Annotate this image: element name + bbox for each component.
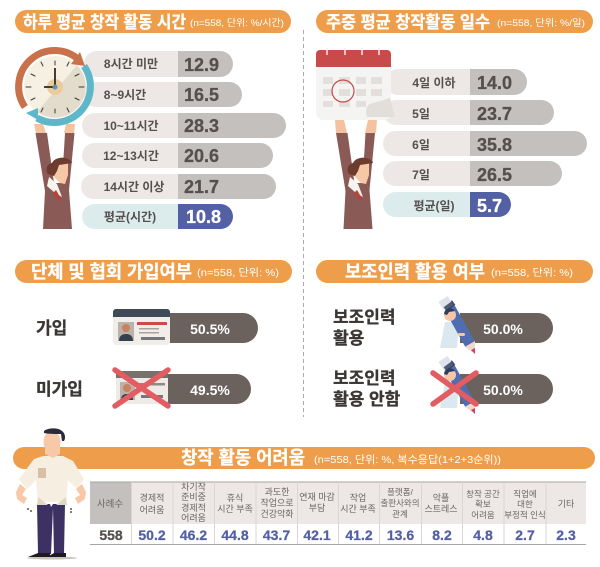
table: difficulty percentages: 시간 부족 — [217, 504, 253, 514]
heading: difficulties — [13, 447, 595, 469]
row: uses assistant: 50.0% — [483, 321, 523, 337]
row: 6 days: 6일 — [412, 138, 430, 152]
row: 12 to 13 hours — [82, 143, 273, 168]
row: 7 days — [383, 161, 562, 186]
heading: assistant use: (n=558, 단위: %) — [491, 266, 573, 279]
heading: membership — [15, 260, 292, 283]
icon: person with pencil — [440, 299, 475, 354]
row: not joined — [36, 370, 251, 406]
table: difficulty percentages: 경제적 — [140, 492, 164, 503]
row: not joined: 미가입 — [36, 380, 83, 399]
table: difficulty percentages: 휴식 — [227, 493, 243, 503]
heading: difficulties: 창작 활동 어려움 — [181, 448, 305, 468]
icon: man holding calendar — [316, 48, 395, 229]
row: average days: 평균(일) — [413, 199, 455, 213]
row: 10 to 11 hours — [82, 113, 286, 138]
heading: membership: (n=558, 단위: %) — [197, 266, 279, 279]
row: joined: 50.5% — [190, 321, 230, 337]
icon: crossed person with pencil — [433, 359, 476, 414]
table: difficulty percentages: 44.8 — [221, 527, 249, 543]
table: difficulty percentages — [90, 481, 586, 544]
row: not joined: 49.5% — [190, 382, 230, 398]
table: difficulty percentages: 관계 — [392, 509, 408, 519]
row: no assistant: 활용 안함 — [333, 390, 401, 409]
table: difficulty percentages: 42.1 — [303, 527, 331, 543]
table: difficulty percentages: 8.2 — [432, 527, 452, 543]
row: under 8 hours: 12.9 — [184, 55, 219, 75]
row: under 4 days — [385, 69, 527, 95]
row: no assistant — [333, 359, 553, 414]
row: under 4 days: 14.0 — [477, 73, 512, 93]
heading: daily hours: 하루 평균 창작 활동 시간 — [23, 13, 186, 32]
row: 5 days — [383, 100, 554, 125]
row: under 8 hours — [84, 51, 233, 77]
row: average days: 5.7 — [477, 196, 502, 216]
table: difficulty percentages: 시간 부족 — [340, 504, 376, 514]
row: 10 to 11 hours: 28.3 — [184, 116, 219, 136]
table: difficulty percentages: 41.2 — [345, 527, 373, 543]
table: difficulty percentages: 558 — [99, 527, 123, 543]
row: average hours: 평균(시간) — [104, 210, 156, 224]
row: 7 days: 7일 — [412, 168, 430, 182]
table: difficulty percentages: 건강악화 — [260, 508, 294, 519]
table: difficulty percentages: 과도한 — [265, 487, 289, 497]
table: difficulty percentages: 창작 공간 — [466, 489, 500, 499]
table: difficulty percentages: 직업에 — [513, 489, 537, 499]
table: difficulty percentages: 사례수 — [97, 499, 123, 510]
row: 8 to 9 hours: 16.5 — [184, 85, 219, 105]
row: 5 days: 23.7 — [477, 104, 512, 124]
row: 5 days: 5일 — [412, 107, 430, 121]
icon: id card — [113, 309, 170, 345]
table: difficulty percentages: 출판사와의 — [380, 498, 420, 508]
table: difficulty percentages: 2.3 — [556, 527, 576, 543]
row: joined: 가입 — [36, 319, 67, 338]
icon: man with empty pockets — [16, 428, 86, 560]
row: 7 days: 26.5 — [477, 165, 512, 185]
row: uses assistant: 활용 — [333, 329, 364, 348]
row: over 14 hours: 14시간 이상 — [104, 180, 164, 194]
icon: man holding clock — [19, 51, 90, 229]
row: over 14 hours — [81, 174, 276, 199]
table: difficulty percentages: 플랫폼/ — [387, 487, 414, 497]
table: difficulty percentages: 4.8 — [473, 527, 493, 543]
panel: assistant use — [316, 260, 593, 414]
row: joined — [36, 309, 258, 345]
table: difficulty percentages: 43.7 — [263, 527, 290, 543]
row: average hours: 10.8 — [186, 207, 221, 227]
heading: difficulties: (n=558, 단위: %, 복수응답(1+2+3순위)) — [314, 453, 501, 466]
row: 12 to 13 hours: 20.6 — [184, 146, 219, 166]
table: difficulty percentages: 대한 — [517, 499, 533, 509]
table: difficulty percentages: 스트레스 — [424, 504, 458, 514]
table: difficulty percentages: 2.7 — [515, 527, 535, 543]
table: difficulty percentages: 기타 — [558, 499, 575, 509]
table: difficulty percentages: 경제적 — [181, 502, 206, 513]
heading: weekly days — [316, 10, 593, 33]
panel: daily average hours — [15, 10, 291, 229]
table: difficulty percentages: 차기작 — [181, 481, 206, 492]
table: difficulty percentages: 부담 — [309, 502, 325, 513]
row: no assistant: 보조인력 — [333, 369, 396, 388]
table: difficulty percentages: 어려움 — [140, 505, 164, 515]
row: 12 to 13 hours: 12~13시간 — [103, 149, 159, 163]
table: difficulty percentages: 연재 마감 — [299, 491, 335, 502]
table: difficulty percentages: 작업으로 — [260, 498, 294, 508]
table: difficulty percentages: 13.6 — [387, 527, 414, 543]
row: 10 to 11 hours: 10~11시간 — [103, 119, 159, 133]
table: difficulty percentages: 준비중 — [181, 492, 206, 502]
row: no assistant: 50.0% — [483, 382, 523, 398]
row: 8 to 9 hours: 8~9시간 — [104, 88, 146, 102]
heading: daily hours — [15, 10, 291, 33]
table: difficulty percentages: 확보 — [475, 499, 491, 509]
table: difficulty percentages: 어려움 — [181, 513, 206, 523]
panel: association membership — [15, 260, 292, 406]
row: under 4 days: 4일 이하 — [412, 76, 456, 90]
heading: assistant use — [316, 260, 593, 283]
icon: crossed id card — [115, 370, 168, 406]
row: 6 days — [383, 131, 587, 156]
table: difficulty percentages: 어려움 — [471, 510, 495, 520]
row: under 8 hours: 8시간 미만 — [104, 57, 158, 71]
heading: assistant use: 보조인력 활용 여부 — [345, 262, 485, 282]
row: average hours — [82, 204, 233, 229]
table: difficulty percentages: 46.2 — [180, 527, 207, 543]
heading: membership: 단체 및 협회 가입여부 — [31, 262, 192, 282]
row: 6 days: 35.8 — [477, 135, 512, 155]
row: uses assistant: 보조인력 — [333, 308, 396, 327]
table: difficulty percentages: 작업 — [350, 493, 366, 503]
row: uses assistant — [333, 299, 553, 354]
heading: weekly days: 주중 평균 창작활동 일수 — [326, 13, 490, 32]
row: 8 to 9 hours — [84, 82, 242, 107]
heading: daily hours: (n=558, 단위: %/시간) — [190, 17, 284, 29]
row: over 14 hours: 21.7 — [184, 177, 219, 197]
panel: creative difficulties — [13, 428, 595, 560]
table: difficulty percentages: 악플 — [433, 492, 449, 503]
table: difficulty percentages: 부정적 인식 — [504, 510, 546, 520]
heading: weekly days: (n=558, 단위: %/일) — [497, 17, 585, 29]
row: average days — [383, 192, 511, 217]
panel: weekly average days — [316, 10, 593, 229]
table: difficulty percentages: 50.2 — [138, 527, 166, 543]
